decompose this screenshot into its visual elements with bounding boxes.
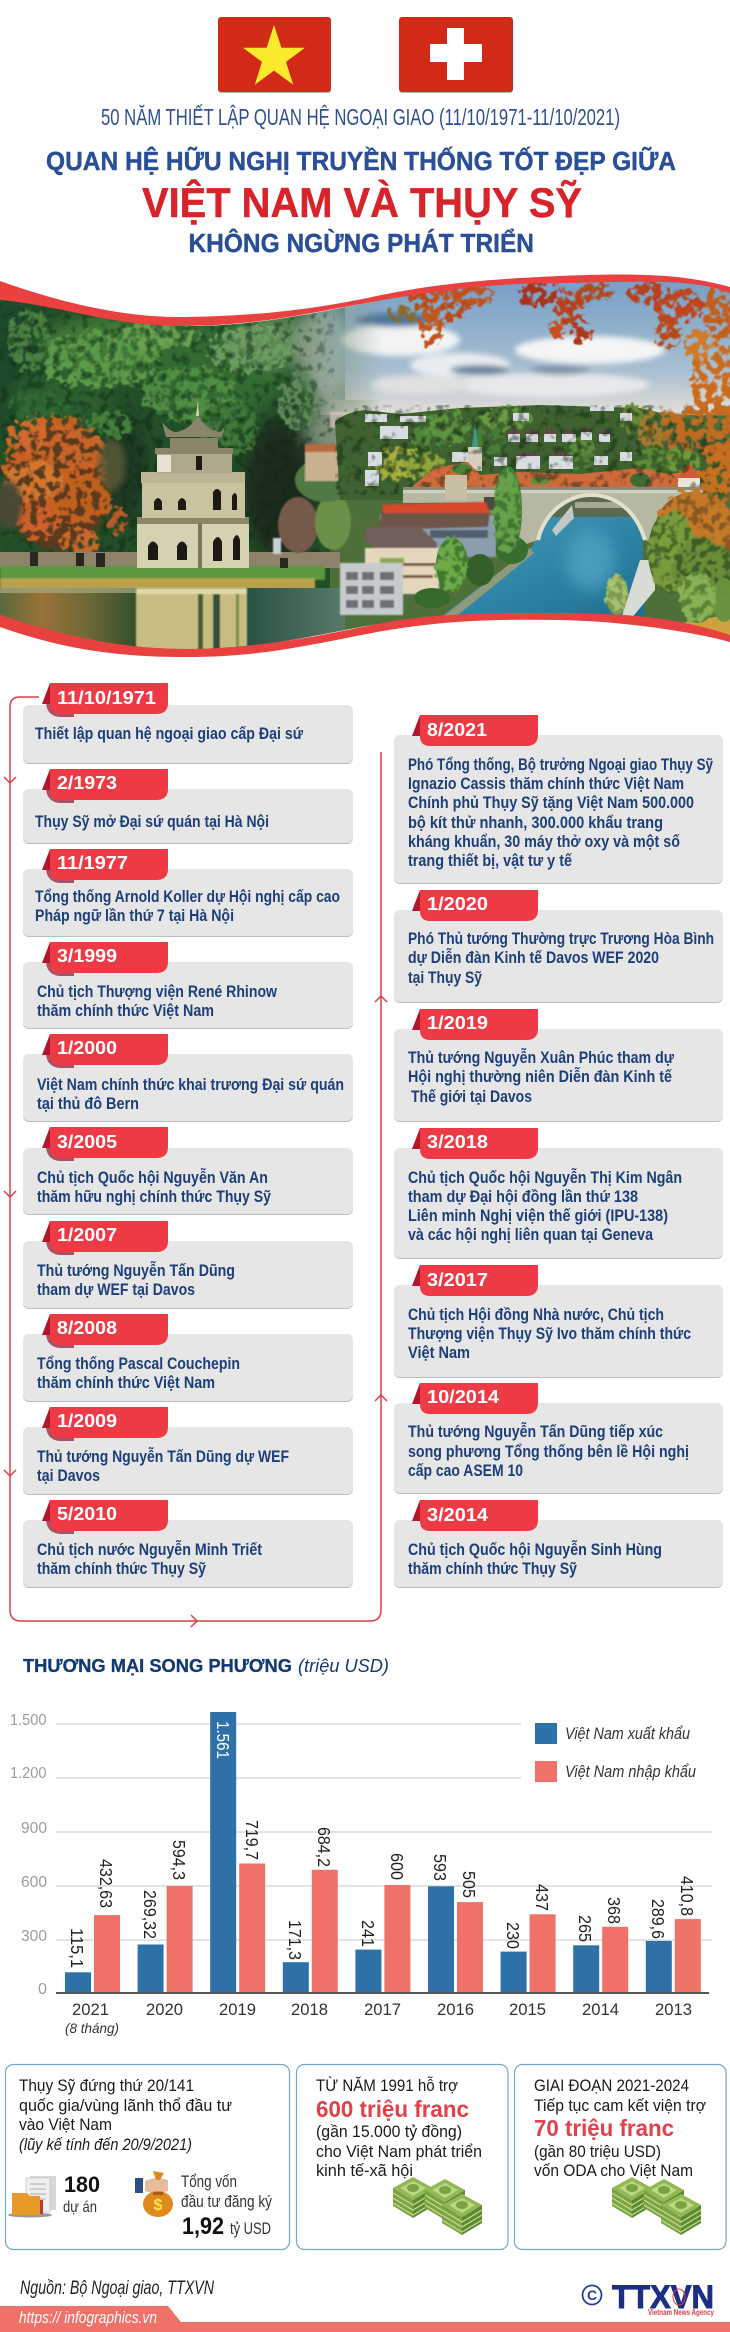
event 1/2007: 1/2007 bbox=[57, 1224, 117, 1245]
red wave band: bottom bbox=[0, 613, 730, 657]
panel: 600 million franc: kinh tế-xã hội bbox=[316, 2161, 413, 2180]
icon: documents and folder bbox=[8, 2176, 56, 2218]
event 1/2000 bbox=[23, 1034, 353, 1122]
panel: 600 million franc: TỪ NĂM 1991 hỗ trợ bbox=[316, 2076, 458, 2095]
event 1/2019: Thế giới tại Davos bbox=[411, 1088, 532, 1106]
event 8/2021 bbox=[394, 715, 723, 884]
event 3/2005: 3/2005 bbox=[57, 1131, 117, 1152]
event 3/2014 bbox=[394, 1500, 723, 1588]
event 2/1973: 2/1973 bbox=[57, 772, 117, 793]
grid bbox=[56, 1723, 712, 1941]
event 3/2005 bbox=[23, 1127, 353, 1215]
event 1/2009: tại Davos bbox=[37, 1467, 100, 1485]
event 1/2000: Việt Nam chính thức khai trương Đại sứ quán bbox=[37, 1076, 344, 1094]
logo: TTXVN: C bbox=[587, 2287, 597, 2303]
chart heading: THƯƠNG MẠI SONG PHƯƠNG bbox=[23, 1655, 292, 1676]
event 3/2014: Chủ tịch Quốc hội Nguyễn Sinh Hùng bbox=[408, 1540, 662, 1559]
value labels: 265 bbox=[575, 1915, 595, 1942]
hero photo: Hanoi and Bern bbox=[0, 270, 730, 670]
value labels: 115,1 bbox=[67, 1928, 87, 1968]
panel: investment: Thụy Sỹ đứng thứ 20/141 bbox=[19, 2076, 194, 2095]
panel: investment: 1,92 bbox=[182, 2213, 224, 2240]
flag: Switzerland bbox=[399, 17, 513, 93]
icon: money stacks bbox=[393, 2177, 482, 2235]
event 1/2007: Thủ tướng Nguyễn Tấn Dũng bbox=[37, 1261, 235, 1280]
event 11/10/1971: Thiết lập quan hệ ngoại giao cấp Đại sứ bbox=[35, 725, 303, 743]
timeline connector line bbox=[4, 697, 387, 1627]
value labels: 437 bbox=[532, 1884, 552, 1911]
value labels: 171,3 bbox=[285, 1920, 305, 1960]
event 10/2014: cấp cao ASEM 10 bbox=[408, 1462, 523, 1480]
event 1/2009: 1/2009 bbox=[57, 1410, 117, 1431]
event 3/2017 bbox=[394, 1265, 723, 1378]
panel: 600 million franc: cho Việt Nam phát triển bbox=[316, 2142, 482, 2161]
ground and grass bbox=[0, 552, 340, 568]
panel: investment bbox=[6, 2064, 290, 2250]
value labels: 368 bbox=[604, 1897, 624, 1924]
event 3/2018: Chủ tịch Quốc hội Nguyễn Thị Kim Ngân bbox=[408, 1168, 682, 1187]
y axis labels bbox=[10, 1712, 47, 1998]
event 1/2009 bbox=[23, 1407, 353, 1495]
event 11/1977: Pháp ngữ lần thứ 7 tại Hà Nội bbox=[35, 907, 234, 925]
y axis labels: 600 bbox=[21, 1874, 47, 1891]
red wave band: top bbox=[0, 274, 730, 326]
event 3/2018 bbox=[394, 1128, 723, 1259]
event 3/1999: Chủ tịch Thượng viện René Rhinow bbox=[37, 983, 277, 1001]
year labels bbox=[65, 2000, 692, 2036]
hill with houses bbox=[335, 399, 730, 500]
event 5/2010 bbox=[23, 1500, 353, 1588]
event 8/2008 bbox=[23, 1314, 353, 1402]
y axis labels: 1.500 bbox=[10, 1712, 47, 1729]
event 3/2005: thăm hữu nghị chính thức Thụy Sỹ bbox=[37, 1188, 272, 1206]
value labels: 719,7 bbox=[242, 1820, 262, 1860]
event 3/2018: 3/2018 bbox=[427, 1131, 488, 1152]
year labels: 2014 bbox=[582, 2000, 619, 2019]
panel: investment: (lũy kế tính đến 20/9/2021) bbox=[19, 2135, 192, 2154]
y axis labels: 0 bbox=[38, 1981, 47, 1998]
export bars bbox=[65, 1712, 672, 1993]
chart heading: (triệu USD) bbox=[298, 1655, 389, 1676]
event 1/2019: 1/2019 bbox=[427, 1012, 488, 1033]
legend bbox=[535, 1723, 696, 1782]
event 1/2020: dự Diễn đàn Kinh tế Davos WEF 2020 bbox=[408, 948, 659, 967]
panel: 600 million franc: (gần 15.000 tỷ đồng) bbox=[316, 2122, 462, 2141]
event 10/2014: Thủ tướng Nguyễn Tấn Dũng tiếp xúc bbox=[408, 1422, 663, 1441]
value labels bbox=[67, 1721, 697, 1968]
event 11/10/1971 bbox=[23, 683, 353, 764]
autumn leaves bbox=[387, 280, 730, 502]
heading line 1: QUAN HỆ HỮU NGHỊ TRUYỀN THỐNG TỐT ĐẸP GIỮA bbox=[46, 146, 676, 176]
panel: 70 million franc: (gần 80 triệu USD) bbox=[534, 2142, 661, 2161]
event 3/2017: 3/2017 bbox=[427, 1269, 488, 1290]
year labels: 2016 bbox=[437, 2000, 474, 2019]
event 3/1999: 3/1999 bbox=[57, 945, 117, 966]
event 11/1977: 11/1977 bbox=[57, 852, 128, 873]
event 1/2007 bbox=[23, 1221, 353, 1309]
value labels: 593 bbox=[430, 1854, 450, 1881]
event 1/2020: 1/2020 bbox=[427, 893, 488, 914]
year labels: 2020 bbox=[146, 2000, 183, 2019]
panel: 600 million franc bbox=[296, 2064, 508, 2250]
title block bbox=[46, 103, 676, 258]
event 11/1977: Tổng thống Arnold Koller dự Hội nghị cấp cao bbox=[35, 888, 340, 906]
heading line 2: VIỆT NAM VÀ THỤY SỸ bbox=[142, 178, 582, 226]
value labels: 505 bbox=[459, 1871, 479, 1898]
event 3/2005: Chủ tịch Quốc hội Nguyễn Văn An bbox=[37, 1168, 268, 1187]
event 8/2021: Chính phủ Thụy Sỹ tặng Việt Nam 500.000 bbox=[408, 794, 694, 812]
event 10/2014: song phương Tổng thống bên lề Hội nghị bbox=[408, 1443, 689, 1461]
value labels: 241 bbox=[358, 1920, 378, 1947]
event 8/2021: Ignazio Cassis thăm chính thức Việt Nam bbox=[408, 775, 684, 793]
icon: money stacks bbox=[612, 2177, 701, 2235]
river bbox=[442, 497, 645, 617]
event 1/2000: 1/2000 bbox=[57, 1037, 117, 1058]
panel: 600 million franc: 600 triệu franc bbox=[316, 2096, 469, 2122]
panel: 70 million franc: 70 triệu franc bbox=[534, 2115, 674, 2141]
event 1/2000: tại thủ đô Bern bbox=[37, 1095, 139, 1113]
footer bar: https:// infographics.vn bbox=[19, 2308, 157, 2327]
event 1/2020 bbox=[394, 890, 723, 1003]
event 10/2014: 10/2014 bbox=[427, 1386, 500, 1407]
event 5/2010: 5/2010 bbox=[57, 1503, 117, 1524]
panel: investment: dự án bbox=[63, 2199, 97, 2216]
event 1/2019: Thủ tướng Nguyễn Xuân Phúc tham dự bbox=[408, 1048, 674, 1067]
legend: Việt Nam nhập khẩu bbox=[565, 1763, 696, 1781]
event 1/2007: tham dự WEF tại Davos bbox=[37, 1281, 195, 1299]
panel: investment: quốc gia/vùng lãnh thổ đầu tư bbox=[19, 2096, 232, 2115]
year labels: 2019 bbox=[219, 2000, 256, 2019]
year labels: 2015 bbox=[509, 2000, 546, 2019]
panel: 70 million franc: Tiếp tục cam kết viện trợ bbox=[534, 2096, 706, 2115]
tower reflection bbox=[136, 588, 247, 654]
event 8/2008: Tổng thống Pascal Couchepin bbox=[37, 1355, 240, 1373]
value labels: 684,2 bbox=[314, 1827, 334, 1867]
source: Nguồn: Bộ Ngoại giao, TTXVN bbox=[20, 2278, 214, 2299]
event 8/2008: thăm chính thức Việt Nam bbox=[37, 1374, 215, 1392]
Bern trees bbox=[414, 466, 730, 645]
event 8/2021: kháng khuẩn, 30 máy thở oxy và một số bbox=[408, 833, 680, 851]
value labels: 594,3 bbox=[169, 1840, 189, 1880]
event 10/2014 bbox=[394, 1383, 723, 1494]
panel: 70 million franc bbox=[514, 2064, 726, 2250]
sky bbox=[313, 282, 730, 415]
event 3/2017: Việt Nam bbox=[408, 1344, 470, 1362]
value labels: 289,6 bbox=[648, 1899, 668, 1939]
event 3/1999: thăm chính thức Việt Nam bbox=[37, 1002, 214, 1020]
year labels: 2017 bbox=[364, 2000, 401, 2019]
event 8/2021: 8/2021 bbox=[427, 719, 487, 740]
panel: investment: vào Việt Nam bbox=[19, 2115, 112, 2134]
blended trees and buildings in centre bbox=[272, 412, 354, 555]
footer bar bbox=[0, 2306, 730, 2332]
bar chart: bilateral trade bbox=[10, 1712, 712, 2036]
Turtle Tower bbox=[137, 400, 249, 568]
panel: 70 million franc: vốn ODA cho Việt Nam bbox=[534, 2161, 693, 2180]
event 1/2019 bbox=[394, 1009, 723, 1122]
icon: money bag in hand bbox=[135, 2171, 173, 2217]
event 3/1999 bbox=[23, 942, 353, 1029]
logo: TTXVN: TTXVN bbox=[612, 2279, 714, 2315]
flag: Vietnam bbox=[218, 17, 331, 93]
panel: investment: 180 bbox=[64, 2172, 100, 2197]
year labels: 2021 bbox=[72, 2000, 109, 2019]
event 3/2018: Liên minh Nghị viện thế giới (IPU-138) bbox=[408, 1207, 668, 1225]
value labels: 1.561 bbox=[213, 1721, 233, 1759]
event 8/2008: 8/2008 bbox=[57, 1317, 117, 1338]
panel: investment: đầu tư đăng ký bbox=[181, 2193, 273, 2211]
event 5/2010: Chủ tịch nước Nguyễn Minh Triết bbox=[37, 1540, 262, 1559]
event 11/10/1971: 11/10/1971 bbox=[57, 687, 156, 708]
event 2/1973 bbox=[23, 769, 353, 844]
Bern buildings bbox=[340, 502, 496, 615]
panel: investment: tỷ USD bbox=[230, 2220, 271, 2238]
event 3/2018: tham dự Đại hội đồng lần thứ 138 bbox=[408, 1188, 638, 1206]
y axis labels: 1.200 bbox=[10, 1765, 47, 1782]
value labels: 432,63 bbox=[96, 1859, 116, 1908]
value labels: 410,8 bbox=[677, 1876, 697, 1916]
y axis labels: 300 bbox=[21, 1928, 47, 1945]
year labels: 2013 bbox=[655, 2000, 692, 2019]
event 1/2019: Hội nghị thường niên Diễn đàn Kinh tế bbox=[408, 1067, 673, 1086]
lake bbox=[0, 588, 345, 649]
year labels: (8 tháng) bbox=[65, 2020, 119, 2036]
value labels: 230 bbox=[503, 1922, 523, 1949]
orange tree bbox=[0, 415, 128, 556]
timeline: left column bbox=[23, 683, 353, 1588]
event 5/2010: thăm chính thức Thụy Sỹ bbox=[37, 1560, 207, 1578]
arrowheads bbox=[4, 777, 387, 1627]
timeline: right column bbox=[394, 715, 723, 1588]
heading line 3: KHÔNG NGỪNG PHÁT TRIỂN bbox=[188, 228, 534, 258]
event 3/2014: thăm chính thức Thụy Sỹ bbox=[408, 1560, 578, 1578]
value labels: 600 bbox=[387, 1853, 407, 1880]
event 8/2021: trang thiết bị, vật tư y tế bbox=[408, 852, 573, 870]
panel: investment: Tổng vốn bbox=[181, 2173, 237, 2191]
event 3/2018: và các hội nghị liên quan tại Geneva bbox=[408, 1226, 654, 1244]
icon: money bag in hand: $ bbox=[154, 2197, 163, 2214]
legend: Việt Nam xuất khẩu bbox=[565, 1725, 690, 1743]
y axis labels: 900 bbox=[21, 1820, 47, 1837]
bridge bbox=[403, 475, 703, 546]
year labels: 2018 bbox=[291, 2000, 328, 2019]
import bars bbox=[94, 1864, 701, 1993]
event 8/2021: bộ kít thử nhanh, 300.000 khẩu trang bbox=[408, 814, 663, 832]
event 2/1973: Thụy Sỹ mở Đại sứ quán tại Hà Nội bbox=[35, 813, 269, 831]
event 1/2009: Thủ tướng Nguyễn Tấn Dũng dự WEF bbox=[37, 1447, 289, 1466]
panel: 70 million franc: GIAI ĐOẠN 2021-2024 bbox=[534, 2076, 689, 2095]
value labels: 269,32 bbox=[140, 1890, 160, 1939]
event 1/2020: tại Thụy Sỹ bbox=[408, 969, 483, 987]
event 3/2014: 3/2014 bbox=[427, 1504, 489, 1525]
event 11/1977 bbox=[23, 849, 353, 937]
event 3/2017: Chủ tịch Hội đồng Nhà nước, Chủ tịch bbox=[408, 1306, 664, 1324]
